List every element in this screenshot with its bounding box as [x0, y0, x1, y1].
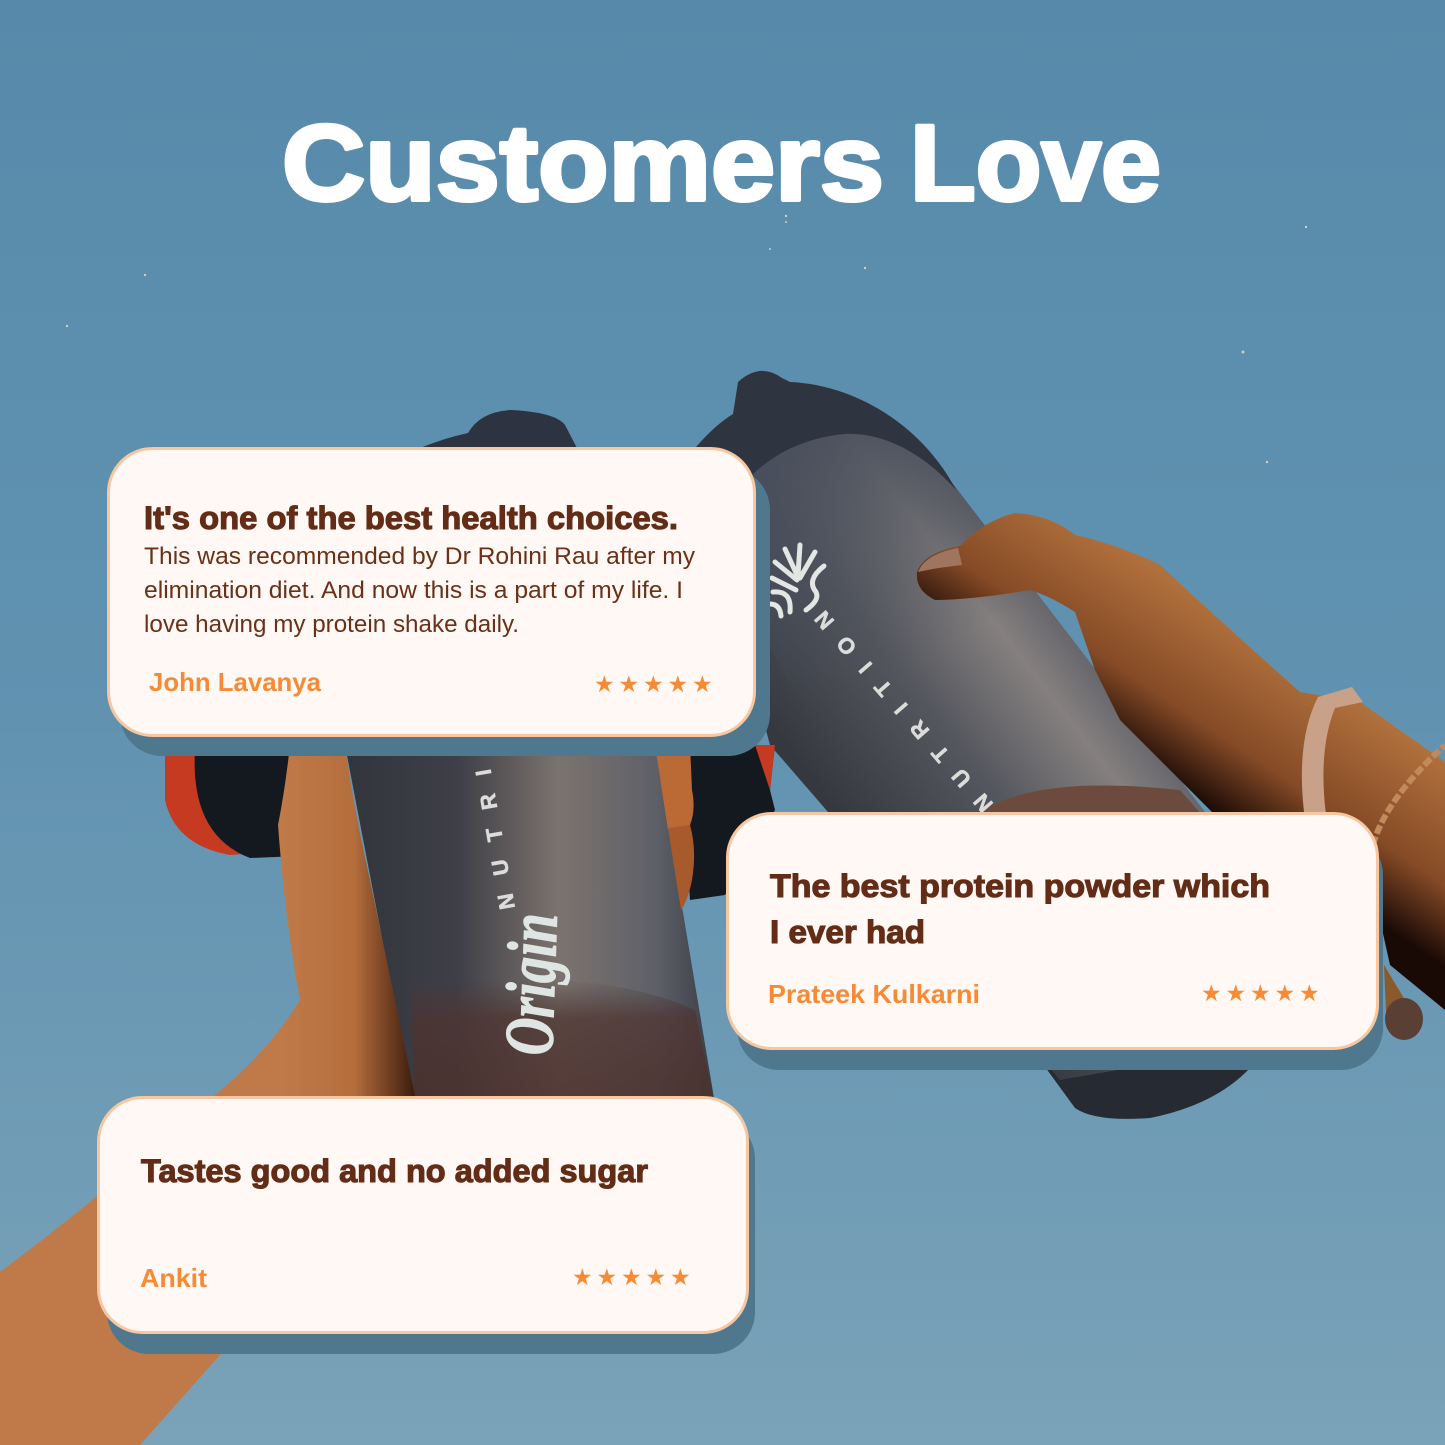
review heading: It's one of the best health choices. — [144, 500, 678, 536]
star rating: ★★★★★ — [572, 1265, 691, 1291]
left bottle cap — [420, 410, 578, 450]
review body: elimination diet. And now this is a part of my life. I — [144, 577, 683, 604]
card shadow — [107, 1117, 755, 1354]
card background — [98, 1098, 748, 1332]
card background — [728, 814, 1378, 1048]
left bottle body — [345, 745, 716, 1110]
photo: left hand — [0, 745, 418, 1445]
reviewer name: Ankit — [140, 1263, 207, 1293]
bottle base — [1040, 1060, 1250, 1119]
review heading: The best protein powder which — [770, 868, 1270, 904]
photo: right hand — [917, 513, 1445, 1040]
review body — [144, 543, 695, 638]
star rating: ★★★★★ — [594, 672, 713, 698]
fingers — [655, 745, 694, 910]
reviewer name: Prateek Kulkarni — [768, 979, 980, 1009]
bottle logo — [770, 545, 824, 616]
title: Customers — [282, 102, 884, 223]
bottle cap — [696, 371, 956, 490]
review heading: Tastes good and no added sugar — [141, 1153, 648, 1189]
left bottle text: NUTRI — [471, 767, 520, 911]
held cap behind hand — [165, 745, 775, 900]
bottle brand text: NUTRITION — [810, 606, 998, 817]
bead — [1384, 965, 1423, 1040]
card shadow — [120, 468, 770, 756]
card 1: John Lavanya — [108, 448, 770, 756]
card shadow — [737, 833, 1383, 1070]
review body: love having my protein shake daily. — [144, 611, 519, 638]
review heading — [770, 868, 1270, 950]
chain bracelet — [1373, 745, 1445, 845]
thumb nail — [918, 548, 962, 572]
bottle reddish band — [985, 786, 1215, 830]
bangle — [1302, 687, 1363, 815]
review heading: I ever had — [770, 914, 925, 950]
review body: This was recommended by Dr Rohini Rau after my — [144, 543, 695, 570]
bottle body — [720, 425, 1290, 1080]
dust specks — [66, 215, 1307, 463]
bottle upper shade — [720, 425, 1090, 700]
title — [282, 102, 1161, 223]
photo: right bottle — [696, 371, 1290, 1119]
card 2: Prateek Kulkarni — [728, 814, 1383, 1070]
photo: left bottle — [165, 410, 775, 1110]
card background — [108, 448, 754, 736]
left bottle script logo: Origin — [491, 912, 573, 1057]
title: Love — [910, 102, 1161, 223]
reviewer name: John Lavanya — [149, 667, 322, 697]
card 3: Ankit — [98, 1098, 755, 1354]
star rating: ★★★★★ — [1201, 981, 1320, 1007]
